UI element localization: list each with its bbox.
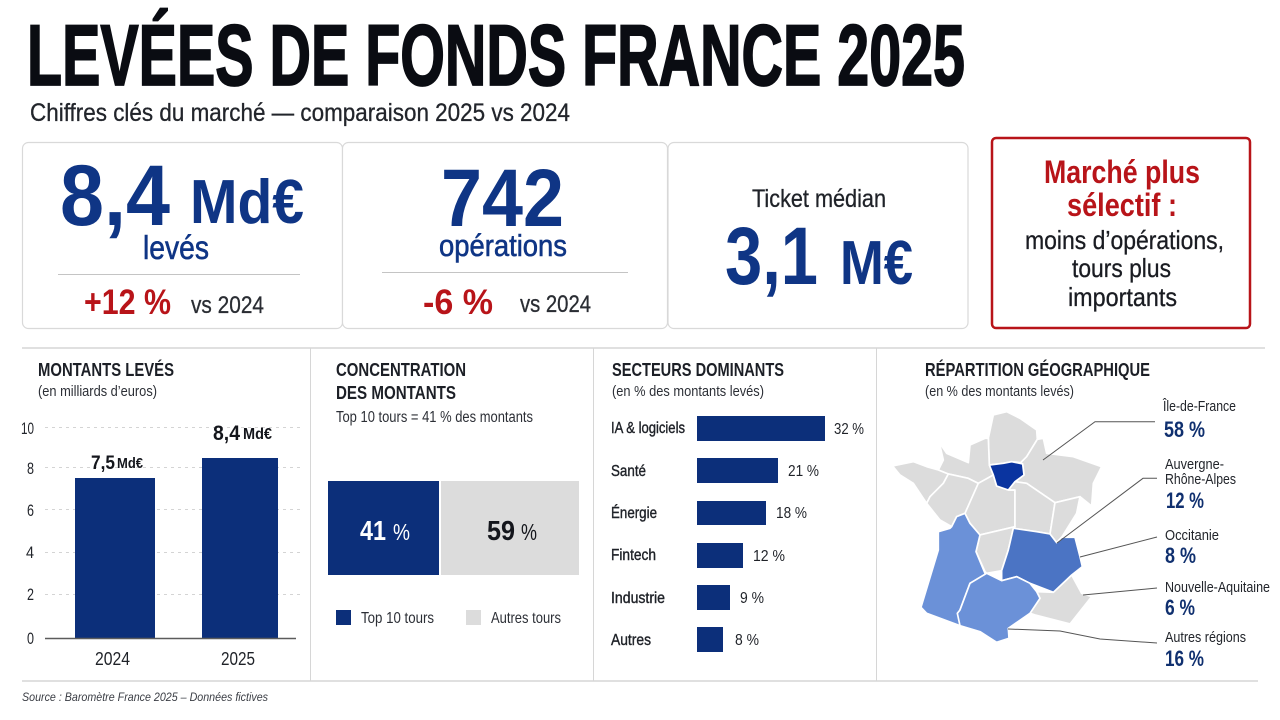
horizontal bar chart: IA & logiciels bbox=[611, 420, 685, 437]
heading: répartition géographique: RÉPARTITION GÉOGRAPHIQUE bbox=[925, 359, 1150, 380]
callout: marché plus sélectif bbox=[992, 138, 1250, 328]
label: Auvergne-Rhône-Alpes: Auvergne- bbox=[1165, 456, 1224, 473]
horizontal bar chart: Énergie bbox=[611, 503, 657, 522]
bar chart: 2024 vs 2025: 2025 bbox=[221, 649, 255, 669]
panel: concentration des montants bbox=[311, 349, 593, 681]
stacked bar: 41 % / 59 %: % bbox=[521, 519, 537, 545]
heading: secteurs dominants: SECTEURS DOMINANTS bbox=[612, 360, 784, 380]
panel: répartition géographique: (en % des montants levés) bbox=[925, 383, 1074, 400]
KPI card: opérations: -6 % bbox=[423, 283, 493, 322]
label: Auvergne-Rhône-Alpes: 12 % bbox=[1166, 488, 1204, 513]
panel: secteurs dominants: (en % des montants levés) bbox=[612, 383, 764, 400]
horizontal bar chart: 12 % bbox=[753, 548, 785, 565]
subtitle: Chiffres clés du marché — comparaison 2025 vs 2024 bbox=[30, 99, 570, 127]
KPI card: ticket médian: 3,1 bbox=[725, 211, 818, 302]
bar chart: 2024 vs 2025: Md€ bbox=[243, 426, 272, 443]
bar chart: 2024 vs 2025 bbox=[21, 419, 300, 669]
label: Occitanie: 8 % bbox=[1165, 543, 1196, 568]
legend: Top 10 tours bbox=[361, 610, 434, 627]
heading: concentration: CONCENTRATION bbox=[336, 360, 466, 380]
label: Île-de-France: Île-de-France bbox=[1162, 398, 1236, 415]
bar chart: 2024 vs 2025: 10 bbox=[21, 419, 34, 438]
KPI card: opérations: vs 2024 bbox=[520, 291, 591, 318]
stacked bar: 41 % / 59 % bbox=[328, 481, 579, 575]
stacked bar: 41 % / 59 %: 41 bbox=[360, 515, 386, 546]
label: Autres régions bbox=[1165, 629, 1246, 671]
panel: répartition géographique bbox=[877, 349, 1277, 681]
KPI card: opérations bbox=[342, 142, 668, 328]
bar chart: 2024 vs 2025: 8 bbox=[27, 459, 34, 478]
KPI card: montant levé: vs 2024 bbox=[191, 292, 264, 319]
label: Autres régions: Autres régions bbox=[1165, 629, 1246, 646]
horizontal bar chart bbox=[611, 416, 864, 652]
callout: marché plus sélectif: Marché plus bbox=[1044, 154, 1200, 190]
bar chart: 2024 vs 2025: 6 bbox=[27, 501, 34, 520]
label: Occitanie: Occitanie bbox=[1165, 527, 1219, 544]
horizontal bar chart: Autres bbox=[611, 632, 651, 649]
bar chart: 2024 vs 2025: 4 bbox=[26, 543, 34, 562]
horizontal bar chart: 9 % bbox=[740, 590, 764, 607]
callout: marché plus sélectif: moins d’opérations, bbox=[1025, 225, 1224, 255]
label: Auvergne-Rhône-Alpes: Rhône-Alpes bbox=[1165, 471, 1236, 488]
leader lines bbox=[1008, 422, 1157, 643]
bar chart: 2024 vs 2025: 7,5 bbox=[91, 453, 115, 474]
heading: concentration: DES MONTANTS bbox=[336, 383, 456, 403]
label: Occitanie bbox=[1165, 527, 1219, 568]
horizontal bar chart: 32 % bbox=[834, 421, 864, 438]
stacked bar: 41 % / 59 %: 59 bbox=[487, 515, 515, 546]
horizontal bar chart: 18 % bbox=[776, 505, 807, 522]
source note: Source : Baromètre France 2025 – Données fictives bbox=[22, 690, 268, 704]
label: Nouvelle-Aquitaine bbox=[1165, 579, 1270, 620]
panel: secteurs dominants bbox=[594, 349, 876, 681]
panel: concentration des montants: Top 10 tours = 41 % des montants bbox=[336, 409, 533, 426]
label: Nouvelle-Aquitaine: 6 % bbox=[1165, 595, 1195, 620]
panel: montants levés bbox=[21, 349, 310, 681]
bar chart: 2024 vs 2025: 2 bbox=[27, 585, 34, 604]
bar chart: 2024 vs 2025: 2024 bbox=[95, 649, 130, 669]
KPI card: montant levé: 8,4 bbox=[60, 148, 170, 244]
KPI card: montant levé bbox=[22, 142, 342, 328]
horizontal bar chart: 21 % bbox=[788, 463, 819, 480]
KPI card: montant levé: levés bbox=[143, 229, 209, 266]
bar chart: 2024 vs 2025: Md€ bbox=[117, 455, 144, 472]
KPI card: opérations: 742 bbox=[441, 153, 564, 244]
bar chart: 2024 vs 2025: 8,4 bbox=[213, 422, 240, 445]
legend bbox=[336, 610, 561, 627]
label: Île-de-France bbox=[1162, 398, 1236, 442]
KPI card: ticket médian: Ticket médian bbox=[752, 185, 886, 213]
panel: montants levés: (en milliards d’euros) bbox=[38, 383, 157, 400]
heading: concentration bbox=[336, 360, 466, 403]
KPI card: ticket médian: M€ bbox=[840, 229, 913, 298]
legend: Autres tours bbox=[491, 610, 561, 627]
stacked bar: 41 % / 59 %: % bbox=[393, 519, 410, 545]
bar chart: 2024 vs 2025: 0 bbox=[27, 629, 34, 648]
map of France bbox=[893, 412, 1102, 642]
callout: marché plus sélectif: sélectif : bbox=[1067, 187, 1177, 223]
label: Île-de-France: 58 % bbox=[1164, 417, 1205, 442]
KPI card: ticket médian bbox=[668, 142, 968, 328]
horizontal bar chart: 8 % bbox=[735, 632, 759, 649]
KPI card: opérations: opérations bbox=[439, 228, 567, 263]
horizontal bar chart: Santé bbox=[611, 463, 646, 480]
callout: marché plus sélectif: importants bbox=[1068, 282, 1177, 312]
label: Autres régions: 16 % bbox=[1165, 646, 1204, 671]
callout: marché plus sélectif: tours plus bbox=[1072, 253, 1171, 283]
horizontal bar chart: Industrie bbox=[611, 590, 665, 607]
label: Auvergne-Rhône-Alpes bbox=[1165, 456, 1236, 513]
KPI card: montant levé: +12 % bbox=[84, 283, 171, 322]
KPI card: montant levé: Md€ bbox=[190, 168, 304, 237]
heading: montants levés: MONTANTS LEVÉS bbox=[38, 359, 174, 380]
horizontal bar chart: Fintech bbox=[611, 547, 656, 564]
